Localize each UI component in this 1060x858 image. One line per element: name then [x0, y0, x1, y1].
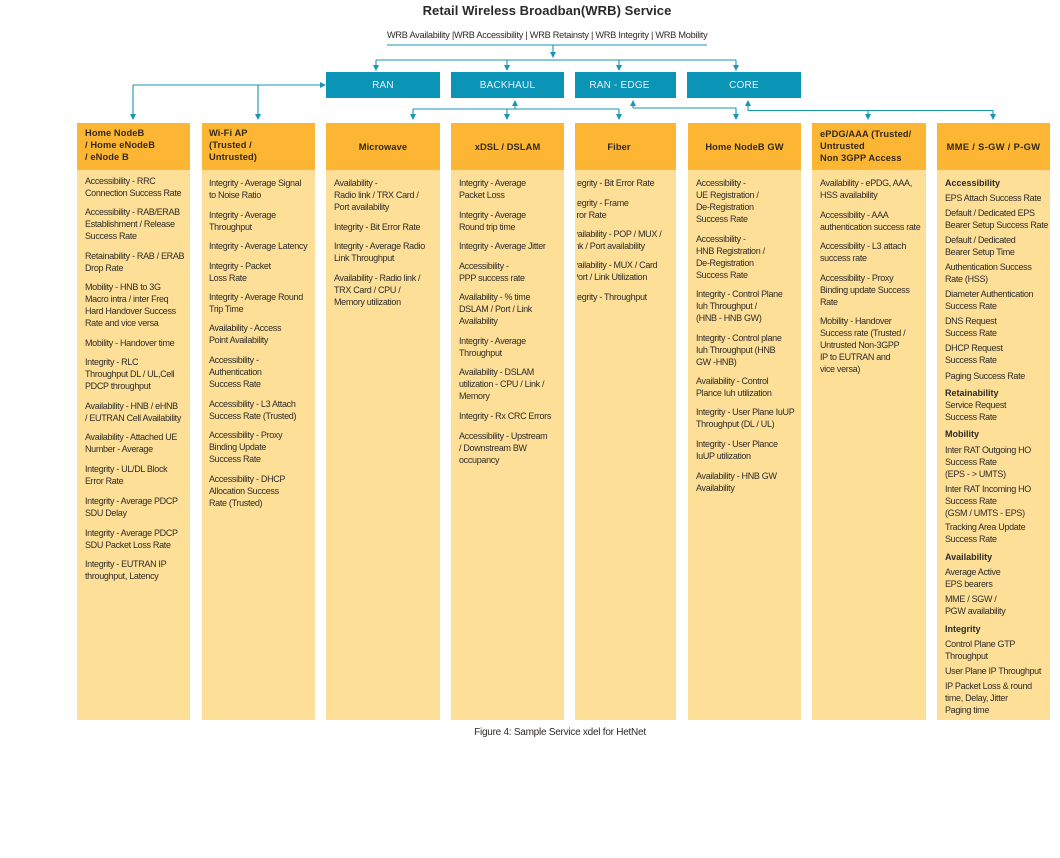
- metrics: Home NodeB GW: Integrity - User Plance: [696, 439, 778, 449]
- metrics: xDSL / DSLAM: Integrity - Average Jitter: [459, 241, 546, 251]
- metrics: Home NodeB: Integrity - Average PDCP: [85, 496, 178, 506]
- heading: MME / S-GW / P-GW: MME / S-GW / P-GW: [947, 142, 1040, 152]
- metrics: Home NodeB GW: Availability: [696, 483, 735, 493]
- metrics: Home NodeB: Establishment / Release: [85, 219, 175, 229]
- heading: xDSL / DSLAM: xDSL / DSLAM: [475, 142, 540, 152]
- metrics: ePDG/AAA: Binding update Success: [820, 285, 910, 295]
- metrics: MME / S-GW / P-GW: Bearer Setup Success Rate: [945, 220, 1048, 230]
- metrics: ePDG/AAA: Mobility - Handover: [820, 316, 891, 326]
- metrics: Microwave: Integrity - Bit Error Rate: [334, 222, 420, 232]
- heading: Wi-Fi AP: (Trusted /: [209, 140, 252, 150]
- metrics: Wi-Fi AP: Success Rate (Trusted): [209, 411, 296, 421]
- metrics: ePDG/AAA: authentication success rate: [820, 222, 920, 232]
- panel: Home NodeB GW: [688, 123, 801, 720]
- title: Retail Wireless Broadban(WRB) Service: [423, 3, 671, 18]
- metrics: Wi-Fi AP: Point Availability: [209, 335, 268, 345]
- metrics: Home NodeB: Availability - Attached UE: [85, 432, 177, 442]
- metrics: ePDG/AAA: Untrusted Non-3GPP: [820, 340, 899, 350]
- metrics: Home NodeB GW: Throughput (DL / UL): [696, 419, 774, 429]
- metrics: Wi-Fi AP: Loss Rate: [209, 273, 247, 283]
- metrics: Home NodeB: Mobility - HNB to 3G: [85, 282, 161, 292]
- metrics: ePDG/AAA: HSS availability: [820, 190, 877, 200]
- metrics: MME / S-GW / P-GW: [945, 178, 1048, 715]
- metrics: Home NodeB: Availability - HNB / eHNB: [85, 401, 178, 411]
- metrics: Home NodeB GW: Accessibility -: [696, 178, 746, 188]
- heading: ePDG/AAA: Non 3GPP Access: [820, 153, 902, 163]
- metrics: Home NodeB GW: Accessibility -: [696, 234, 746, 244]
- heading: ePDG/AAA: [812, 123, 926, 170]
- metrics: Wi-Fi AP: Throughput: [209, 222, 252, 232]
- metrics: Home NodeB: [85, 176, 184, 581]
- metrics: ePDG/AAA: Accessibility - L3 attach: [820, 241, 906, 251]
- metrics: xDSL / DSLAM: Throughput: [459, 348, 502, 358]
- metrics: xDSL / DSLAM: Packet Loss: [459, 190, 505, 200]
- metrics: Wi-Fi AP: Allocation Success: [209, 486, 279, 496]
- panel: Fiber: [575, 123, 676, 720]
- metrics: Wi-Fi AP: Accessibility - L3 Attach: [209, 399, 296, 409]
- category: RAN - EDGE: [575, 72, 676, 98]
- metrics: Home NodeB: Connection Success Rate: [85, 188, 181, 198]
- metrics: Microwave: Radio link / TRX Card /: [334, 190, 419, 200]
- metrics: MME / S-GW / P-GW: Service Request: [945, 400, 1006, 410]
- metrics: MME / S-GW / P-GW: Inter RAT Incoming HO: [945, 484, 1031, 494]
- metrics: MME / S-GW / P-GW: User Plane IP Throughput: [945, 666, 1041, 676]
- metrics: Home NodeB GW: Integrity - User Plane IuUP: [696, 407, 794, 417]
- metrics: Wi-Fi AP: Success Rate: [209, 454, 261, 464]
- metrics: MME / S-GW / P-GW: Success Rate: [945, 457, 997, 467]
- metrics: Wi-Fi AP: Integrity - Average Latency: [209, 241, 307, 251]
- metrics: MME / S-GW / P-GW: Success Rate: [945, 412, 997, 422]
- metrics: MME / S-GW / P-GW: time, Delay, Jitter: [945, 693, 1008, 703]
- metrics: Home NodeB: Drop Rate: [85, 263, 123, 273]
- metrics: MME / S-GW / P-GW: (EPS - > UMTS): [945, 469, 1006, 479]
- metrics: Home NodeB: Integrity - EUTRAN IP: [85, 559, 166, 569]
- metrics: Home NodeB GW: Plance Iuh utilization: [696, 388, 772, 398]
- heading: Home NodeB: / eNode B: [85, 152, 129, 162]
- metrics: MME / S-GW / P-GW: Success Rate: [945, 355, 997, 365]
- metrics: Microwave: Integrity - Average Radio: [334, 241, 425, 251]
- metrics: xDSL / DSLAM: DSLAM / Port / Link: [459, 304, 532, 314]
- metrics: Fiber, left edge clipped: [577, 178, 662, 302]
- heading: Microwave: [326, 123, 440, 170]
- metrics: xDSL / DSLAM: Integrity - Average: [459, 210, 526, 220]
- metrics: Home NodeB: PDCP throughput: [85, 381, 151, 391]
- metrics: Wi-Fi AP: Trip Time: [209, 304, 243, 314]
- metrics: xDSL / DSLAM: Accessibility - Upstream: [459, 431, 547, 441]
- metrics: xDSL / DSLAM: Availability: [459, 316, 498, 326]
- metrics: Home NodeB: Number - Average: [85, 444, 153, 454]
- metrics: Home NodeB: SDU Packet Loss Rate: [85, 540, 171, 550]
- metrics: Microwave: Port availability: [334, 202, 389, 212]
- category: CORE: [687, 72, 801, 98]
- heading: ePDG/AAA: ePDG/AAA (Trusted/: [820, 129, 911, 139]
- heading: Fiber: [575, 123, 676, 170]
- heading: Home NodeB: Home NodeB: [85, 128, 144, 138]
- metrics: Wi-Fi AP: Accessibility - Proxy: [209, 430, 282, 440]
- metrics: MME / S-GW / P-GW: Accessibility: [945, 178, 1000, 188]
- heading: Home NodeB GW: Home NodeB GW: [705, 142, 784, 152]
- metrics: Home NodeB: / EUTRAN Cell Availability: [85, 413, 181, 423]
- metrics: xDSL / DSLAM: Availability - DSLAM: [459, 367, 534, 377]
- metrics: MME / S-GW / P-GW: Mobility: [945, 429, 979, 439]
- heading: Wi-Fi AP: Untrusted): [209, 152, 257, 162]
- panel: Home NodeB: [77, 123, 190, 720]
- metrics: ePDG/AAA: Success rate (Trusted /: [820, 328, 905, 338]
- metrics: Microwave: Availability - Radio link /: [334, 273, 420, 283]
- metrics: xDSL / DSLAM: Integrity - Average: [459, 336, 526, 346]
- metrics: Home NodeB: Retainability - RAB / ERAB: [85, 251, 184, 261]
- metrics: Wi-Fi AP: Rate (Trusted): [209, 498, 262, 508]
- category: RAN: RAN: [372, 80, 394, 91]
- metrics: MME / S-GW / P-GW: DNS Request: [945, 316, 997, 326]
- metrics: MME / S-GW / P-GW: Success Rate: [945, 496, 997, 506]
- metrics: Wi-Fi AP: Accessibility -: [209, 355, 259, 365]
- metrics: Home NodeB: Rate and vice versa: [85, 318, 158, 328]
- heading: xDSL / DSLAM: [451, 123, 564, 170]
- panel: Microwave: [326, 123, 440, 720]
- metrics: MME / S-GW / P-GW: Inter RAT Outgoing HO: [945, 445, 1031, 455]
- metrics: Microwave: Memory utilization: [334, 297, 401, 307]
- metrics: Wi-Fi AP: Authentication: [209, 367, 262, 377]
- metrics: Home NodeB GW: HNB Registration /: [696, 246, 765, 256]
- metrics: MME / S-GW / P-GW: MME / SGW /: [945, 594, 996, 604]
- heading: Wi-Fi AP: Wi-Fi AP: [209, 128, 248, 138]
- metrics: xDSL / DSLAM: [459, 178, 551, 465]
- metrics: Home NodeB: SDU Delay: [85, 508, 127, 518]
- metrics: Home NodeB GW: De-Registration: [696, 202, 754, 212]
- metrics: Home NodeB GW: Iuh Throughput (HNB: [696, 345, 775, 355]
- metrics: MME / S-GW / P-GW: Availability: [945, 552, 992, 562]
- metrics: Home NodeB GW: Success Rate: [696, 270, 748, 280]
- metrics: MME / S-GW / P-GW: Throughput: [945, 651, 988, 661]
- metrics: Microwave: [334, 178, 425, 307]
- metrics: MME / S-GW / P-GW: Paging Success Rate: [945, 371, 1025, 381]
- metrics: MME / S-GW / P-GW: Success Rate: [945, 534, 997, 544]
- metrics: MME / S-GW / P-GW: Retainability: [945, 388, 999, 398]
- metrics: MME / S-GW / P-GW: (GSM / UMTS - EPS): [945, 508, 1025, 518]
- metrics: ePDG/AAA: Availability - ePDG, AAA,: [820, 178, 912, 188]
- metrics: MME / S-GW / P-GW: EPS Attach Success Rate: [945, 193, 1041, 203]
- metrics: ePDG/AAA: Rate: [820, 297, 838, 307]
- metrics: MME / S-GW / P-GW: Default / Dedicated: [945, 235, 1015, 245]
- metrics: xDSL / DSLAM: Integrity - Average: [459, 178, 526, 188]
- metrics: MME / S-GW / P-GW: Control Plane GTP: [945, 639, 1015, 649]
- figure caption: Figure 4: Sample Service xdel for HetNet: [474, 727, 646, 738]
- metrics: xDSL / DSLAM: Availability - % time: [459, 292, 530, 302]
- metrics: Home NodeB GW: Availability - HNB GW: [696, 471, 777, 481]
- metrics: Wi-Fi AP: Integrity - Average: [209, 210, 276, 220]
- metrics: xDSL / DSLAM: Accessibility -: [459, 261, 509, 271]
- metrics: Microwave: Availability -: [334, 178, 377, 188]
- connector arrows: [130, 44, 996, 120]
- metrics: Home NodeB GW: Iuh Throughput /: [696, 301, 757, 311]
- metrics: Home NodeB GW: UE Registration /: [696, 190, 759, 200]
- metrics: xDSL / DSLAM: Memory: [459, 391, 490, 401]
- metrics: MME / S-GW / P-GW: PGW availability: [945, 606, 1005, 616]
- metrics: Home NodeB GW: Success Rate: [696, 214, 748, 224]
- category: BACKHAUL: [451, 72, 564, 98]
- metrics: xDSL / DSLAM: utilization - CPU / Link /: [459, 379, 544, 389]
- panel: ePDG/AAA: [812, 123, 926, 720]
- metrics: Home NodeB: Hard Handover Success: [85, 306, 176, 316]
- metrics: xDSL / DSLAM: occupancy: [459, 455, 499, 465]
- category: RAN: [326, 72, 440, 98]
- heading: Home NodeB GW: [688, 123, 801, 170]
- metrics: ePDG/AAA: [820, 178, 920, 374]
- metrics: MME / S-GW / P-GW: Diameter Authentication: [945, 289, 1033, 299]
- metrics: ePDG/AAA: Accessibility - Proxy: [820, 273, 893, 283]
- metrics: Home NodeB GW: De-Registration: [696, 258, 754, 268]
- metrics: MME / S-GW / P-GW: Authentication Success: [945, 262, 1032, 272]
- category: BACKHAUL: BACKHAUL: [480, 80, 535, 91]
- metrics: Home NodeB GW: Integrity - Control Plane: [696, 289, 783, 299]
- metrics: Home NodeB: Accessibility - RRC: [85, 176, 155, 186]
- metrics: MME / S-GW / P-GW: Success Rate: [945, 301, 997, 311]
- metrics: MME / S-GW / P-GW: Integrity: [945, 624, 981, 634]
- metrics: Home NodeB: Integrity - RLC: [85, 357, 138, 367]
- metrics: Home NodeB: Macro intra / inter Freq: [85, 294, 168, 304]
- metrics: MME / S-GW / P-GW: Default / Dedicated EPS: [945, 208, 1035, 218]
- metrics: Wi-Fi AP: Integrity - Average Round: [209, 292, 303, 302]
- metrics: Microwave: Link Throughput: [334, 253, 394, 263]
- heading: Fiber: Fiber: [607, 142, 631, 152]
- category: CORE: CORE: [729, 80, 759, 91]
- metrics: Wi-Fi AP: Availability - Access: [209, 323, 281, 333]
- panel: xDSL / DSLAM: [451, 123, 564, 720]
- panel: MME / S-GW / P-GW: [937, 123, 1050, 720]
- metrics: Home NodeB GW: Integrity - Control plane: [696, 333, 782, 343]
- metrics: xDSL / DSLAM: / Downstream BW: [459, 443, 527, 453]
- metrics: ePDG/AAA: vice versa): [820, 364, 860, 374]
- heading: Microwave: Microwave: [359, 142, 407, 152]
- metrics: ePDG/AAA: success rate: [820, 253, 867, 263]
- metrics: Home NodeB GW: Availability - Control: [696, 376, 768, 386]
- heading: Home NodeB: [77, 123, 190, 170]
- heading: Home NodeB: / Home eNodeB: [85, 140, 155, 150]
- metrics: Wi-Fi AP: [209, 178, 308, 508]
- metrics: MME / S-GW / P-GW: DHCP Request: [945, 343, 1003, 353]
- metrics: Wi-Fi AP: Integrity - Average Signal: [209, 178, 301, 188]
- metrics: Home NodeB GW: (HNB - HNB GW): [696, 313, 762, 323]
- metrics: ePDG/AAA: Accessibility - AAA: [820, 210, 888, 220]
- metrics: Home NodeB: Integrity - Average PDCP: [85, 528, 178, 538]
- metrics: Home NodeB: Throughput DL / UL,Cell: [85, 369, 174, 379]
- metrics: Home NodeB GW: [696, 178, 794, 493]
- metrics: xDSL / DSLAM: Integrity - Rx CRC Errors: [459, 411, 551, 421]
- metrics: Wi-Fi AP: Binding Update: [209, 442, 266, 452]
- metrics: Wi-Fi AP: to Noise Ratio: [209, 190, 261, 200]
- metrics: MME / S-GW / P-GW: Bearer Setup Time: [945, 247, 1015, 257]
- metrics: MME / S-GW / P-GW: Success Rate: [945, 328, 997, 338]
- metrics: MME / S-GW / P-GW: Average Active: [945, 567, 1000, 577]
- metrics: xDSL / DSLAM: Round trip time: [459, 222, 515, 232]
- metrics: Home NodeB GW: GW -HNB): [696, 357, 736, 367]
- metrics: Home NodeB GW: IuUP utilization: [696, 451, 751, 461]
- category: RAN - EDGE: RAN - EDGE: [589, 80, 650, 91]
- metrics: MME / S-GW / P-GW: IP Packet Loss & round: [945, 681, 1032, 691]
- metrics: Home NodeB: Mobility - Handover time: [85, 338, 174, 348]
- panel: Wi-Fi AP: [202, 123, 315, 720]
- heading: MME / S-GW / P-GW: [937, 123, 1050, 170]
- metrics: Home NodeB: throughput, Latency: [85, 571, 158, 581]
- service KPI list: WRB Availability |WRB Accessibility | WRB Retainsty | WRB Integrity | WRB Mobility: [387, 30, 707, 40]
- metrics: xDSL / DSLAM: PPP success rate: [459, 273, 525, 283]
- heading: Wi-Fi AP: [202, 123, 315, 170]
- metrics: Home NodeB: Integrity - UL/DL Block: [85, 464, 167, 474]
- metrics: Microwave: TRX Card / CPU /: [334, 285, 400, 295]
- metrics: ePDG/AAA: IP to EUTRAN and: [820, 352, 890, 362]
- metrics: Wi-Fi AP: Integrity - Packet: [209, 261, 271, 271]
- metrics: Home NodeB: Success Rate: [85, 231, 137, 241]
- metrics: MME / S-GW / P-GW: Tracking Area Update: [945, 522, 1025, 532]
- metrics: Wi-Fi AP: Accessibility - DHCP: [209, 474, 285, 484]
- heading: ePDG/AAA: Untrusted: [820, 141, 865, 151]
- metrics: Home NodeB: Error Rate: [85, 476, 123, 486]
- metrics: Wi-Fi AP: Success Rate: [209, 379, 261, 389]
- metrics: Home NodeB: Accessibility - RAB/ERAB: [85, 207, 180, 217]
- metrics: MME / S-GW / P-GW: Paging time: [945, 705, 989, 715]
- metrics: MME / S-GW / P-GW: EPS bearers: [945, 579, 993, 589]
- metrics: MME / S-GW / P-GW: Rate (HSS): [945, 274, 988, 284]
